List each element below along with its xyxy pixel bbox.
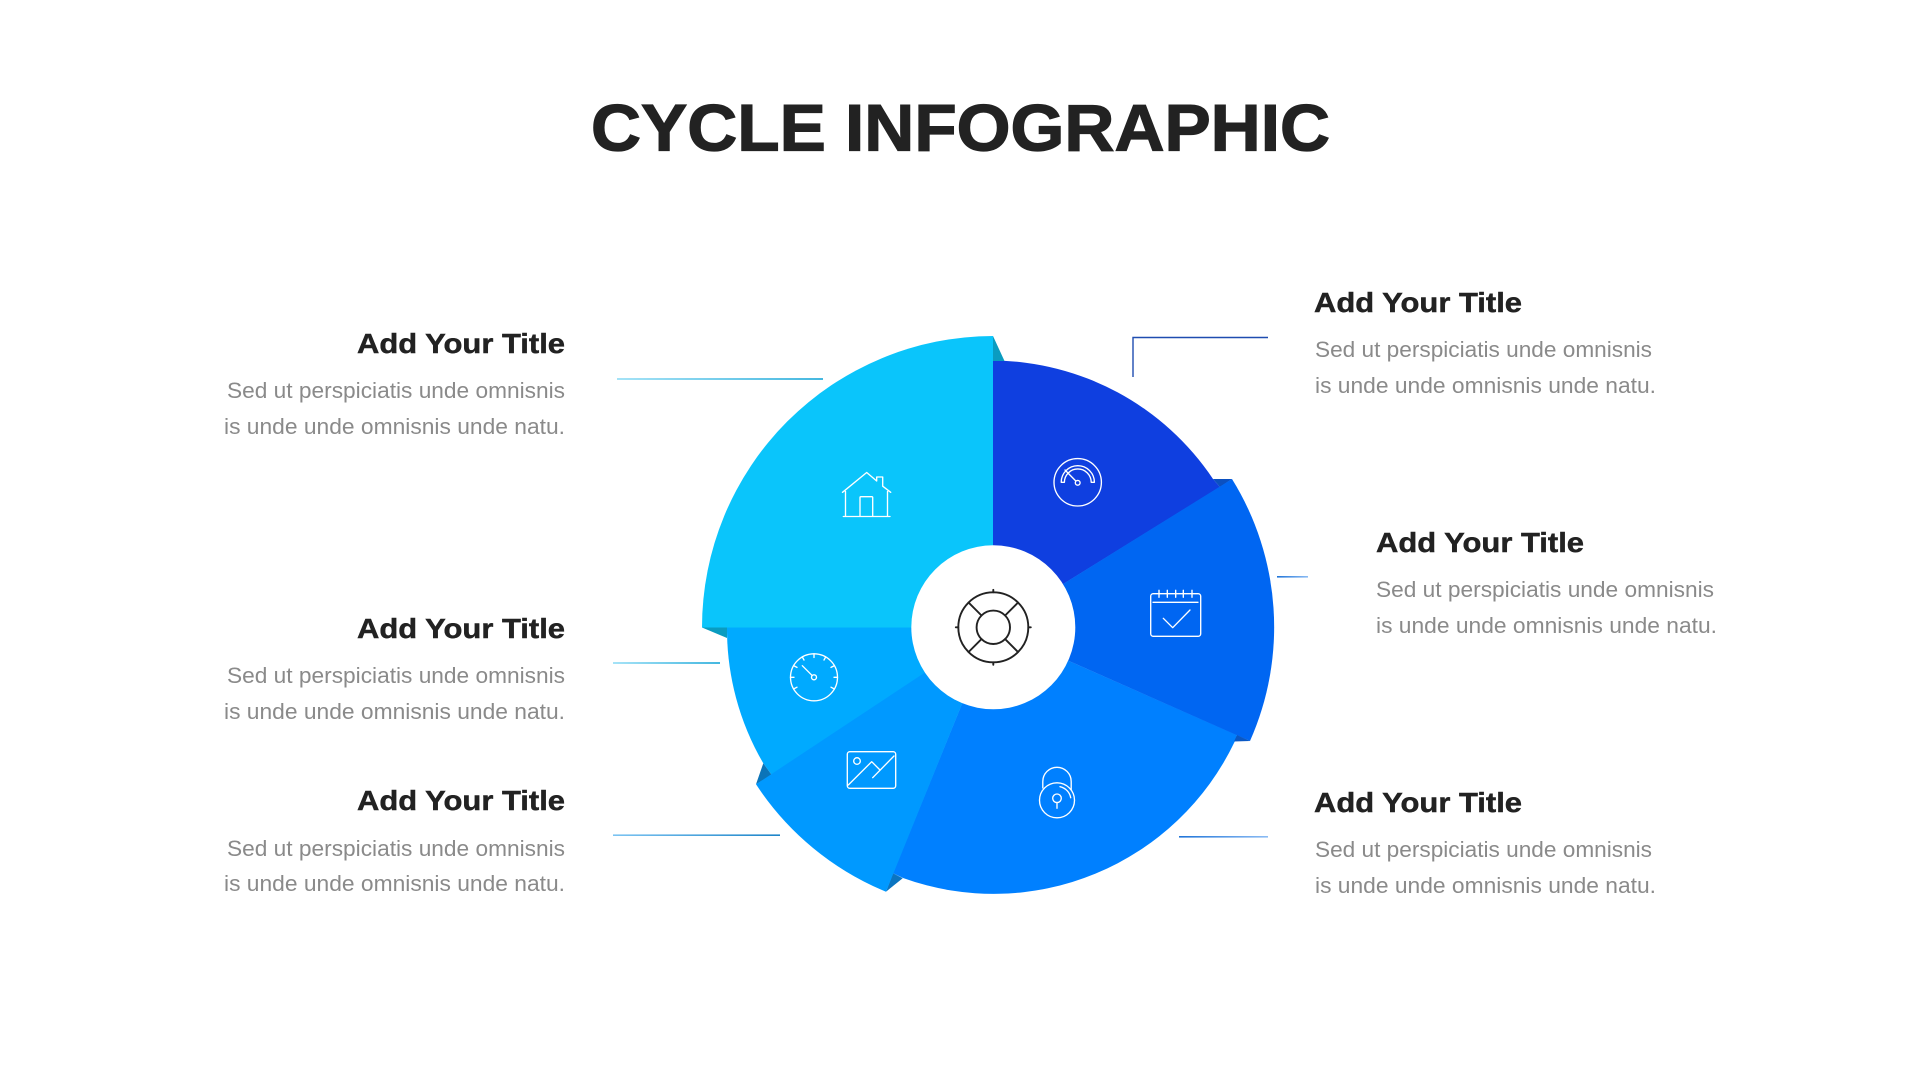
text block: bottom right: is unde unde omnisnis unde natu.: [1315, 873, 1656, 898]
text block: top left: is unde unde omnisnis unde natu.: [224, 414, 565, 439]
cycle wheel: [702, 336, 1274, 894]
text block: top left: Sed ut perspiciatis unde omnisnis: [227, 378, 565, 403]
icon: lifebuoy: [956, 590, 1031, 665]
text block: middle left: Sed ut perspiciatis unde omnisnis: [227, 663, 565, 688]
icon: padlock: [1040, 767, 1074, 818]
connector line: bottom right: [1179, 836, 1268, 838]
segment: azure lower left: [756, 628, 993, 892]
icon: speedometer: [790, 654, 838, 701]
fold: sky blue: [756, 763, 772, 784]
text block: middle left: [224, 613, 565, 724]
connector line: top left: [617, 378, 823, 380]
text block: bottom left: [224, 785, 565, 896]
segment: cyan top left: [702, 336, 993, 628]
text block: bottom left: Add Your Title: [357, 785, 565, 816]
fold: dark blue: [1213, 479, 1232, 487]
connector line: bottom left: [613, 834, 780, 836]
text block: top left: [224, 328, 565, 439]
fold: azure: [886, 873, 903, 892]
connector line: middle left: [613, 662, 720, 664]
text block: middle right: is unde unde omnisnis unde natu.: [1376, 613, 1717, 638]
text block: top right: [1314, 287, 1656, 398]
text block: middle left: is unde unde omnisnis unde natu.: [224, 699, 565, 724]
text block: middle left: Add Your Title: [357, 613, 565, 644]
segment: dark blue: [993, 360, 1220, 628]
text block: middle right: Sed ut perspiciatis unde omnisnis: [1376, 577, 1714, 602]
centre circle: [911, 545, 1075, 709]
text block: bottom right: Sed ut perspiciatis unde omnisnis: [1315, 837, 1652, 862]
connector line: middle right: [1277, 576, 1308, 578]
title: CYCLE INFOGRAPHIC: [591, 90, 1330, 164]
icon: picture: [847, 752, 896, 788]
segment: bright blue bottom: [893, 628, 1237, 894]
icon: calendar: [1151, 590, 1201, 636]
text block: middle right: Add Your Title: [1376, 527, 1584, 558]
text block: bottom right: [1314, 787, 1656, 898]
icon: house: [842, 472, 891, 516]
connector bracket: top right: [1133, 338, 1268, 377]
fold: cyan top: [993, 336, 1004, 361]
text block: bottom right: Add Your Title: [1314, 787, 1522, 818]
text block: top right: is unde unde omnisnis unde natu.: [1315, 373, 1656, 398]
text block: bottom left: Sed ut perspiciatis unde omnisnis: [227, 836, 565, 861]
fold: cyan left: [702, 628, 727, 638]
text block: top right: Add Your Title: [1314, 287, 1522, 318]
text block: top left: Add Your Title: [357, 328, 565, 359]
text block: top right: Sed ut perspiciatis unde omnisnis: [1315, 337, 1652, 362]
icon: gauge: [1054, 459, 1101, 506]
fold: royal blue: [1234, 735, 1250, 742]
segment: sky blue left: [727, 628, 993, 775]
segment: royal blue right: [993, 479, 1274, 741]
text block: middle right: [1376, 527, 1717, 638]
text block: bottom left: is unde unde omnisnis unde natu.: [224, 871, 565, 896]
